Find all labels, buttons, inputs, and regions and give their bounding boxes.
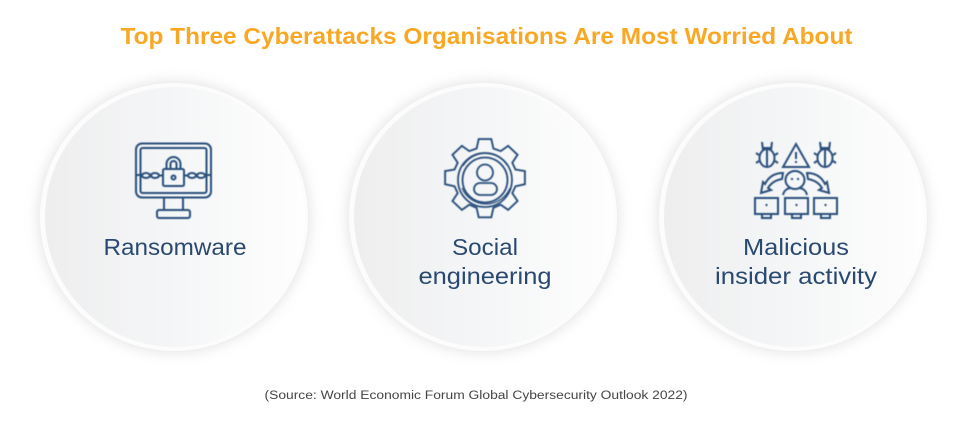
- source note: (Source: World Economic Forum Global Cybersecurity Outlook 2022): [264, 390, 688, 402]
- icon: gear with person: [445, 139, 525, 217]
- icon: locked monitor: [136, 144, 211, 218]
- panel: malicious insider activity: [658, 82, 928, 352]
- title: Top Three Cyberattacks Organisations Are Most Worried About: [120, 23, 853, 49]
- panel: ransomware: [39, 82, 309, 352]
- label: social engineering: engineering: [418, 263, 552, 289]
- label: ransomware: Ransomware: [104, 234, 246, 260]
- label: malicious insider activity: [715, 234, 878, 289]
- label: malicious insider activity: insider activity: [715, 263, 878, 289]
- label: social engineering: [418, 234, 552, 289]
- label: malicious insider activity: Malicious: [743, 234, 849, 260]
- label: social engineering: Social: [452, 234, 518, 260]
- panel: social engineering: [348, 82, 618, 352]
- icon: insider with bugs, warning and computers: [755, 142, 837, 218]
